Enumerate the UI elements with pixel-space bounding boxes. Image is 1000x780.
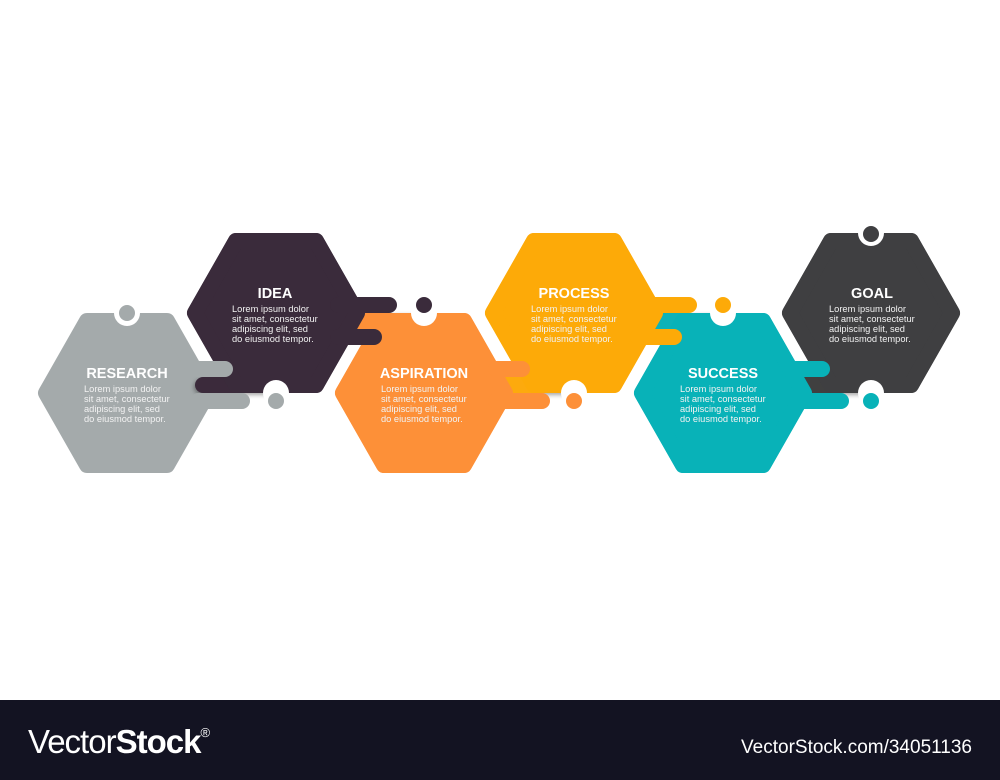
text: idea: sit amet, consectetur (232, 314, 318, 324)
text: aspiration: sit amet, consectetur (381, 394, 467, 404)
connector: idea to aspiration (330, 297, 397, 345)
panel: aspiration (380, 297, 468, 424)
connector: success to goal (787, 361, 849, 409)
connector tongues (195, 313, 882, 393)
connector: research to idea (190, 361, 250, 409)
icon: aspiration dot (416, 297, 432, 313)
panel: idea (232, 286, 318, 409)
text: goal: adipiscing elit, sed (829, 324, 905, 334)
panel: process (531, 286, 617, 409)
heading: success: SUCCESS (688, 366, 758, 382)
logo: VectorStock (28, 723, 200, 760)
heading: idea: IDEA (258, 286, 293, 302)
heading: goal: GOAL (851, 286, 893, 302)
text: goal: sit amet, consectetur (829, 314, 915, 324)
text: idea: adipiscing elit, sed (232, 324, 308, 334)
icon: success dot (715, 297, 731, 313)
text: idea: do eiusmod tempor. (232, 334, 314, 344)
text: idea: Lorem ipsum dolor (232, 304, 309, 314)
heading: research: RESEARCH (86, 366, 168, 382)
icon: goal top dot (863, 226, 879, 242)
text: aspiration: adipiscing elit, sed (381, 404, 457, 414)
text: goal: Lorem ipsum dolor (829, 304, 906, 314)
text: goal: do eiusmod tempor. (829, 334, 911, 344)
logo: ® (200, 725, 210, 740)
heading: process: PROCESS (539, 286, 610, 302)
panel: goal (829, 220, 915, 409)
heading: aspiration: ASPIRATION (380, 366, 468, 382)
hexagon shapes overlay (195, 241, 952, 465)
panel: research (84, 300, 170, 424)
footer bar (0, 700, 1000, 780)
icon: idea dot (268, 393, 284, 409)
hexagon shapes (46, 241, 952, 465)
text: success: adipiscing elit, sed (680, 404, 756, 414)
icon: research dot (119, 305, 135, 321)
footer url: VectorStock.com/34051136 (741, 737, 972, 758)
connector: process to success (630, 297, 697, 345)
text: process: sit amet, consectetur (531, 314, 617, 324)
text: success: sit amet, consectetur (680, 394, 766, 404)
text: research: Lorem ipsum dolor (84, 384, 161, 394)
text: process: Lorem ipsum dolor (531, 304, 608, 314)
text: research: do eiusmod tempor. (84, 414, 166, 424)
icon: goal dot (863, 393, 879, 409)
panel: success (680, 297, 766, 424)
text: aspiration: do eiusmod tempor. (381, 414, 463, 424)
icon: process dot (566, 393, 582, 409)
connector: aspiration to process (488, 361, 550, 409)
text: success: Lorem ipsum dolor (680, 384, 757, 394)
text: process: adipiscing elit, sed (531, 324, 607, 334)
text: success: do eiusmod tempor. (680, 414, 762, 424)
text: aspiration: Lorem ipsum dolor (381, 384, 458, 394)
text: process: do eiusmod tempor. (531, 334, 613, 344)
text: research: adipiscing elit, sed (84, 404, 160, 414)
text: research: sit amet, consectetur (84, 394, 170, 404)
